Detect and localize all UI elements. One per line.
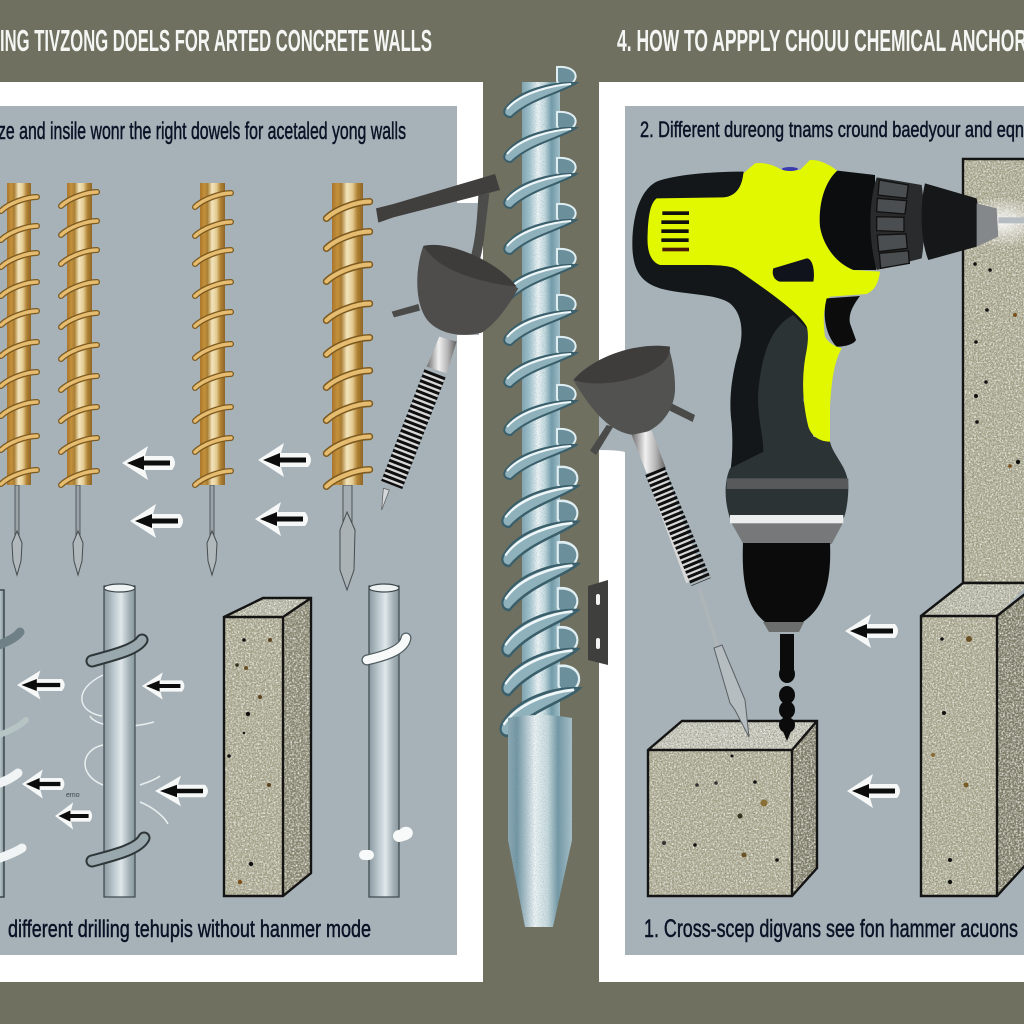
right panel background bbox=[625, 106, 1024, 955]
right arrow lower bbox=[847, 774, 900, 808]
left funnel bowl bbox=[417, 245, 518, 335]
arrow lower left 3 bbox=[22, 770, 64, 798]
left title: ING TIVZONG DOELS FOR ARTED CONCRETE WALLS bbox=[0, 23, 432, 58]
lower wall concrete block bbox=[921, 583, 1024, 896]
right funnel tool bbox=[573, 346, 695, 580]
right funnel spring bbox=[655, 472, 695, 580]
left funnel pin bbox=[392, 304, 420, 317]
left funnel spring and needle bbox=[382, 337, 457, 510]
screw threads bbox=[501, 67, 580, 736]
small concrete block bbox=[648, 721, 817, 896]
arrow lower left 1 bbox=[17, 671, 65, 699]
silver rod 3 bbox=[364, 584, 407, 897]
drill chuck bbox=[743, 543, 830, 622]
right panel frame bbox=[599, 82, 1024, 982]
left panel background bbox=[0, 106, 457, 955]
chuck collar bbox=[763, 622, 804, 632]
right spring coil bbox=[655, 471, 701, 582]
gold dowel 4 bbox=[326, 183, 370, 590]
left subtitle: ze and insile wonr the right dowels for acetaled yong walls bbox=[0, 118, 406, 145]
small rod label: emo bbox=[66, 792, 80, 799]
tall concrete block bbox=[224, 598, 311, 896]
metal bracket bbox=[588, 580, 608, 665]
right needle bbox=[699, 587, 749, 737]
right arrow upper bbox=[845, 614, 898, 648]
silver rod 2 bbox=[82, 584, 168, 897]
drill bbox=[632, 160, 1024, 741]
right funnel bowl bbox=[573, 346, 675, 435]
gold dowel 1 bbox=[1, 183, 37, 575]
upper wall concrete bbox=[958, 159, 1024, 583]
right funnel tube bbox=[632, 431, 666, 473]
drill body bbox=[632, 160, 1024, 544]
arrow lower left 2 bbox=[142, 672, 184, 700]
arrow lower left 5 bbox=[55, 802, 92, 830]
arrow upper left 4 bbox=[255, 502, 308, 536]
left funnel handle bbox=[376, 174, 500, 277]
left panel frame bbox=[0, 82, 483, 982]
screw sleeve tip bbox=[508, 715, 572, 927]
left frame shadow patch bbox=[457, 203, 479, 335]
left caption: different drilling tehupis without hanmer mode bbox=[8, 916, 371, 943]
gold dowel 2 bbox=[61, 183, 97, 575]
gold dowel 3 bbox=[195, 183, 231, 575]
right funnel pins bbox=[590, 403, 695, 455]
arrow upper left 1 bbox=[122, 446, 175, 480]
drill bit bbox=[779, 634, 795, 741]
silver rod 1 bbox=[0, 590, 26, 897]
left funnel tool bbox=[376, 174, 518, 510]
arrow lower left 4 bbox=[155, 776, 208, 806]
arrow upper left 3 bbox=[258, 443, 311, 477]
right frame shadow patch bbox=[599, 372, 625, 452]
arrow upper left 2 bbox=[130, 504, 183, 538]
central silver screw bbox=[501, 67, 580, 927]
